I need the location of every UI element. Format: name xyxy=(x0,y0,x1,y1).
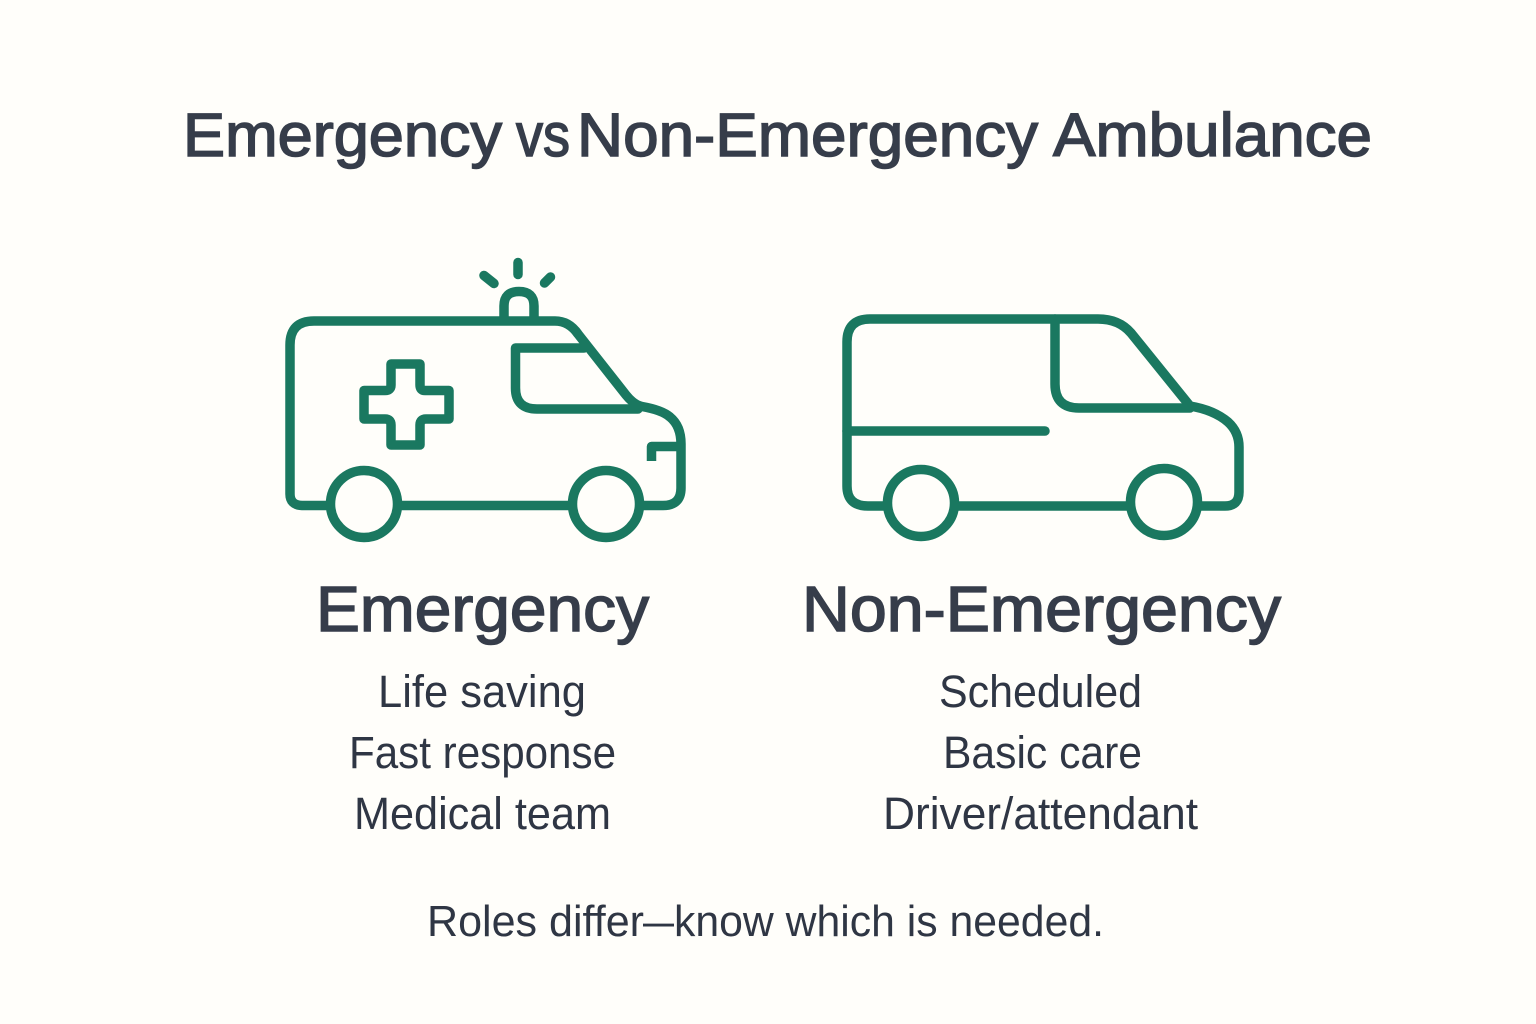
heading: emergency: Emergency xyxy=(316,573,649,645)
icon: non-emergency van xyxy=(847,319,1239,536)
title: Non-Emergency xyxy=(577,101,1039,169)
list: emergency traits: Medical team xyxy=(354,788,611,839)
list: emergency traits: Life saving xyxy=(378,666,586,717)
front wheel xyxy=(1130,468,1198,536)
headlight grille xyxy=(652,446,680,461)
ambulance body outline xyxy=(290,321,681,506)
van side stripe xyxy=(847,426,1045,436)
footer note: Roles differ xyxy=(427,897,644,946)
list: emergency traits xyxy=(349,666,616,839)
list: non-emergency traits: Driver/attendant xyxy=(883,788,1198,839)
van window xyxy=(1055,319,1190,408)
van underbody xyxy=(955,501,1130,511)
list: emergency traits: Fast response xyxy=(349,727,616,778)
siren beacon xyxy=(504,292,534,320)
list: non-emergency traits: Scheduled xyxy=(939,666,1142,717)
title: vs xyxy=(516,101,570,169)
front wheel xyxy=(572,470,640,538)
title xyxy=(183,101,1372,169)
title: Emergency xyxy=(183,101,503,169)
list: non-emergency traits xyxy=(883,666,1198,839)
van body outline xyxy=(847,319,1239,506)
footer note: — xyxy=(643,897,674,946)
medical cross xyxy=(364,364,449,445)
footer note: know which is needed. xyxy=(674,897,1104,946)
title: Ambulance xyxy=(1053,101,1372,169)
list: non-emergency traits: Basic care xyxy=(943,727,1142,778)
rear wheel xyxy=(330,470,398,538)
icon: emergency ambulance xyxy=(290,262,681,538)
heading: non-emergency: Non-Emergency xyxy=(802,573,1281,645)
siren rays xyxy=(484,262,550,284)
ambulance underbody xyxy=(398,501,572,510)
footer note xyxy=(427,897,1104,946)
ambulance window xyxy=(516,348,638,409)
rear wheel xyxy=(888,470,954,536)
